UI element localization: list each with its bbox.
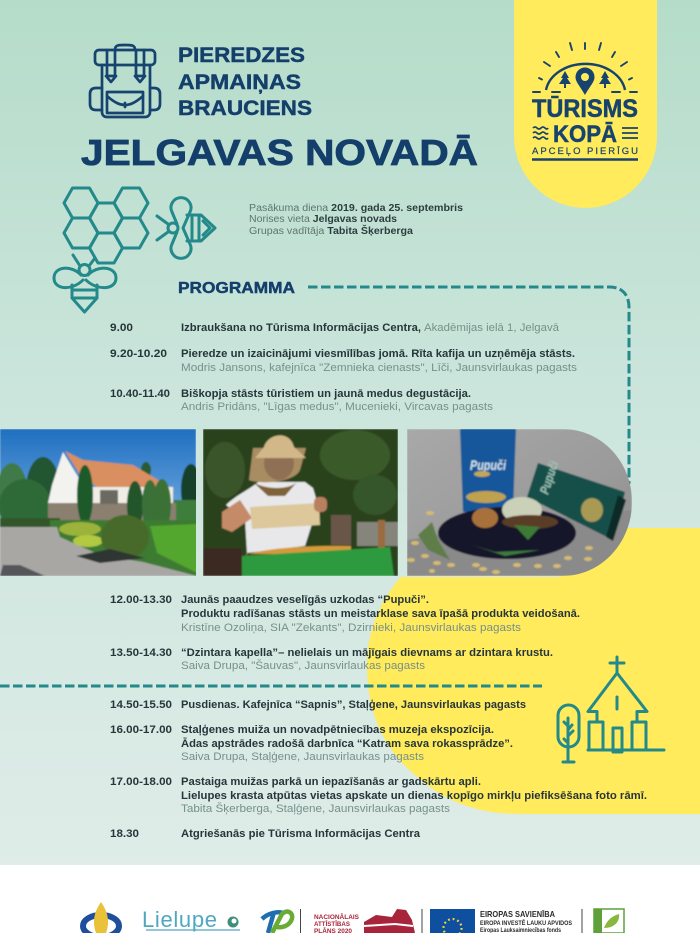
photo: Pupuči snacks: Pupuči xyxy=(470,457,507,473)
logo: EU text: EIROPAS SAVIENĪBA xyxy=(480,909,555,919)
logo: Tūrisms kopā: KOPĀ xyxy=(553,121,617,148)
schedule: morning: Andris Pridāns, "Līgas medus", Mucenieki, Vircavas pagasts xyxy=(181,401,494,413)
event details xyxy=(249,203,463,237)
dashed route line top xyxy=(308,287,629,484)
schedule: evening: Staļģenes muiža un novadpētniecības muzeja ekspozīcija. xyxy=(181,723,494,736)
logo: national development plan: ATTĪSTĪBAS xyxy=(314,920,350,928)
photo: Pupuči snacks xyxy=(407,429,632,576)
logo: ministry wheat xyxy=(83,902,119,933)
schedule: morning: Pieredze un izaicinājumi viesmīlības jomā. Rīta kafija un uzņēmēja stāsts. xyxy=(181,348,575,360)
schedule: morning: Biškopja stāsts tūristiem un jaunā medus degustācija. xyxy=(181,388,471,400)
schedule: evening: 16.00-17.00 xyxy=(110,724,172,736)
logo: Tūrisms kopā: APCEĻO PIERĪGU xyxy=(532,146,638,157)
schedule: morning: 10.40-11.40 xyxy=(110,388,170,400)
schedule: afternoon xyxy=(110,594,580,672)
logo: Tūrisms kopā: TŪRISMS xyxy=(532,95,638,123)
photo: Pupuči snacks: Pupuči xyxy=(537,459,561,496)
schedule: afternoon: Jaunās paaudzes veselīgās uzkodas “Pupuči”. xyxy=(181,594,429,606)
schedule: evening: Saiva Drupa, Staļģene, Jaunsvirlaukas pagasts xyxy=(181,750,425,763)
schedule: afternoon: Kristīne Ozoliņa, SIA "Zekants", Dzirnieki, Jaunsvirlaukas pagasts xyxy=(181,622,522,634)
logo: EU text: EIROPA INVESTĒ LAUKU APVIDOS xyxy=(480,920,572,927)
icon: backpack xyxy=(90,45,160,117)
photo: manor house xyxy=(0,429,201,576)
logo: Lielupe: Lielupe xyxy=(142,907,217,932)
schedule: morning: Izbraukšana no Tūrisma Informācijas Centra, xyxy=(181,322,421,334)
schedule: evening: Atgriešanās pie Tūrisma Informācijas Centra xyxy=(181,828,421,840)
logo: Leader xyxy=(594,909,624,933)
icon: bee right xyxy=(157,198,215,258)
schedule: evening xyxy=(110,698,647,840)
schedule: afternoon: Saiva Drupa, "Šauvas", Jaunsvirlaukas pagasts xyxy=(181,659,426,672)
schedule: evening: 18.30 xyxy=(110,828,139,840)
logo row xyxy=(83,902,624,933)
schedule: afternoon: “Dzintara kapella”– nelielais un mājīgais dievnams ar dzintara krustu. xyxy=(181,647,553,659)
heading: Pieredzes apmaiņas brauciens: BRAUCIENS xyxy=(178,97,312,120)
schedule: evening: 14.50-15.50 xyxy=(110,699,172,711)
schedule: morning xyxy=(110,322,578,413)
heading: Pieredzes apmaiņas brauciens: PIEREDZES xyxy=(178,44,305,67)
icon: honeycomb xyxy=(64,188,148,263)
schedule: evening: Lielupes krasta atpūtas vietas apskate un dienas kopīgo mirkļu piefiksēšana foto rāmī. xyxy=(181,790,647,802)
schedule: evening: 17.00-18.00 xyxy=(110,776,172,788)
logo: national development plan: NACIONĀLAIS xyxy=(314,913,359,921)
event details: Pasākuma diena 2019. gada 25. septembris xyxy=(249,203,463,214)
logo: national development plan xyxy=(314,909,415,933)
yellow blob background xyxy=(367,528,700,814)
yellow logo pill xyxy=(514,0,657,208)
heading: programma: PROGRAMMA xyxy=(178,280,295,297)
event details: Norises vieta Jelgavas novads xyxy=(249,214,397,225)
schedule: evening: Pastaiga muižas parkā un iepazīšanās ar gadskārtu apli. xyxy=(181,776,481,788)
logo: EU flag xyxy=(430,909,475,933)
schedule: morning: Modris Jansons, kafejnīca "Zemnieka cienasts", Līči, Jaunsvirlaukas pagasts xyxy=(181,362,578,374)
schedule: afternoon: 13.50-14.30 xyxy=(110,647,172,659)
title: JELGAVAS NOVADĀ xyxy=(81,132,478,173)
schedule: morning: 9.00 xyxy=(110,322,133,334)
logo: EU text xyxy=(480,909,572,933)
logo: PP partnership xyxy=(262,912,292,933)
logo: Tūrisms kopā xyxy=(532,43,638,160)
event details: Grupas vadītāja Tabita Šķerberga xyxy=(249,224,413,237)
heading: Pieredzes apmaiņas brauciens: APMAIŅAS xyxy=(178,71,301,94)
icon: bee bottom xyxy=(54,255,116,312)
schedule: evening: Pusdienas. Kafejnīca “Sapnis”, Staļģene, Jaunsvirlaukas pagasts xyxy=(181,698,526,711)
heading: Pieredzes apmaiņas brauciens xyxy=(178,44,312,120)
logo dividers xyxy=(300,909,582,933)
schedule: afternoon: 12.00-13.30 xyxy=(110,594,172,606)
schedule: morning: 9.20-10.20 xyxy=(110,348,167,360)
icon: church and tree xyxy=(558,657,664,762)
dashed route line bottom xyxy=(0,684,542,688)
schedule: evening: Ādas apstrādes radošā darbnīca “Katram sava rokassprādze”. xyxy=(181,738,513,750)
schedule: afternoon: Produktu radīšanas stāsts un meistarklase sava īpašā produkta veidošanā. xyxy=(181,608,580,620)
schedule: morning: Akadēmijas ielā 1, Jelgavā xyxy=(424,322,560,334)
schedule: evening: Tabita Šķerberga, Staļģene, Jaunsvirlaukas pagasts xyxy=(181,802,451,815)
photo: beekeeper xyxy=(203,429,398,576)
